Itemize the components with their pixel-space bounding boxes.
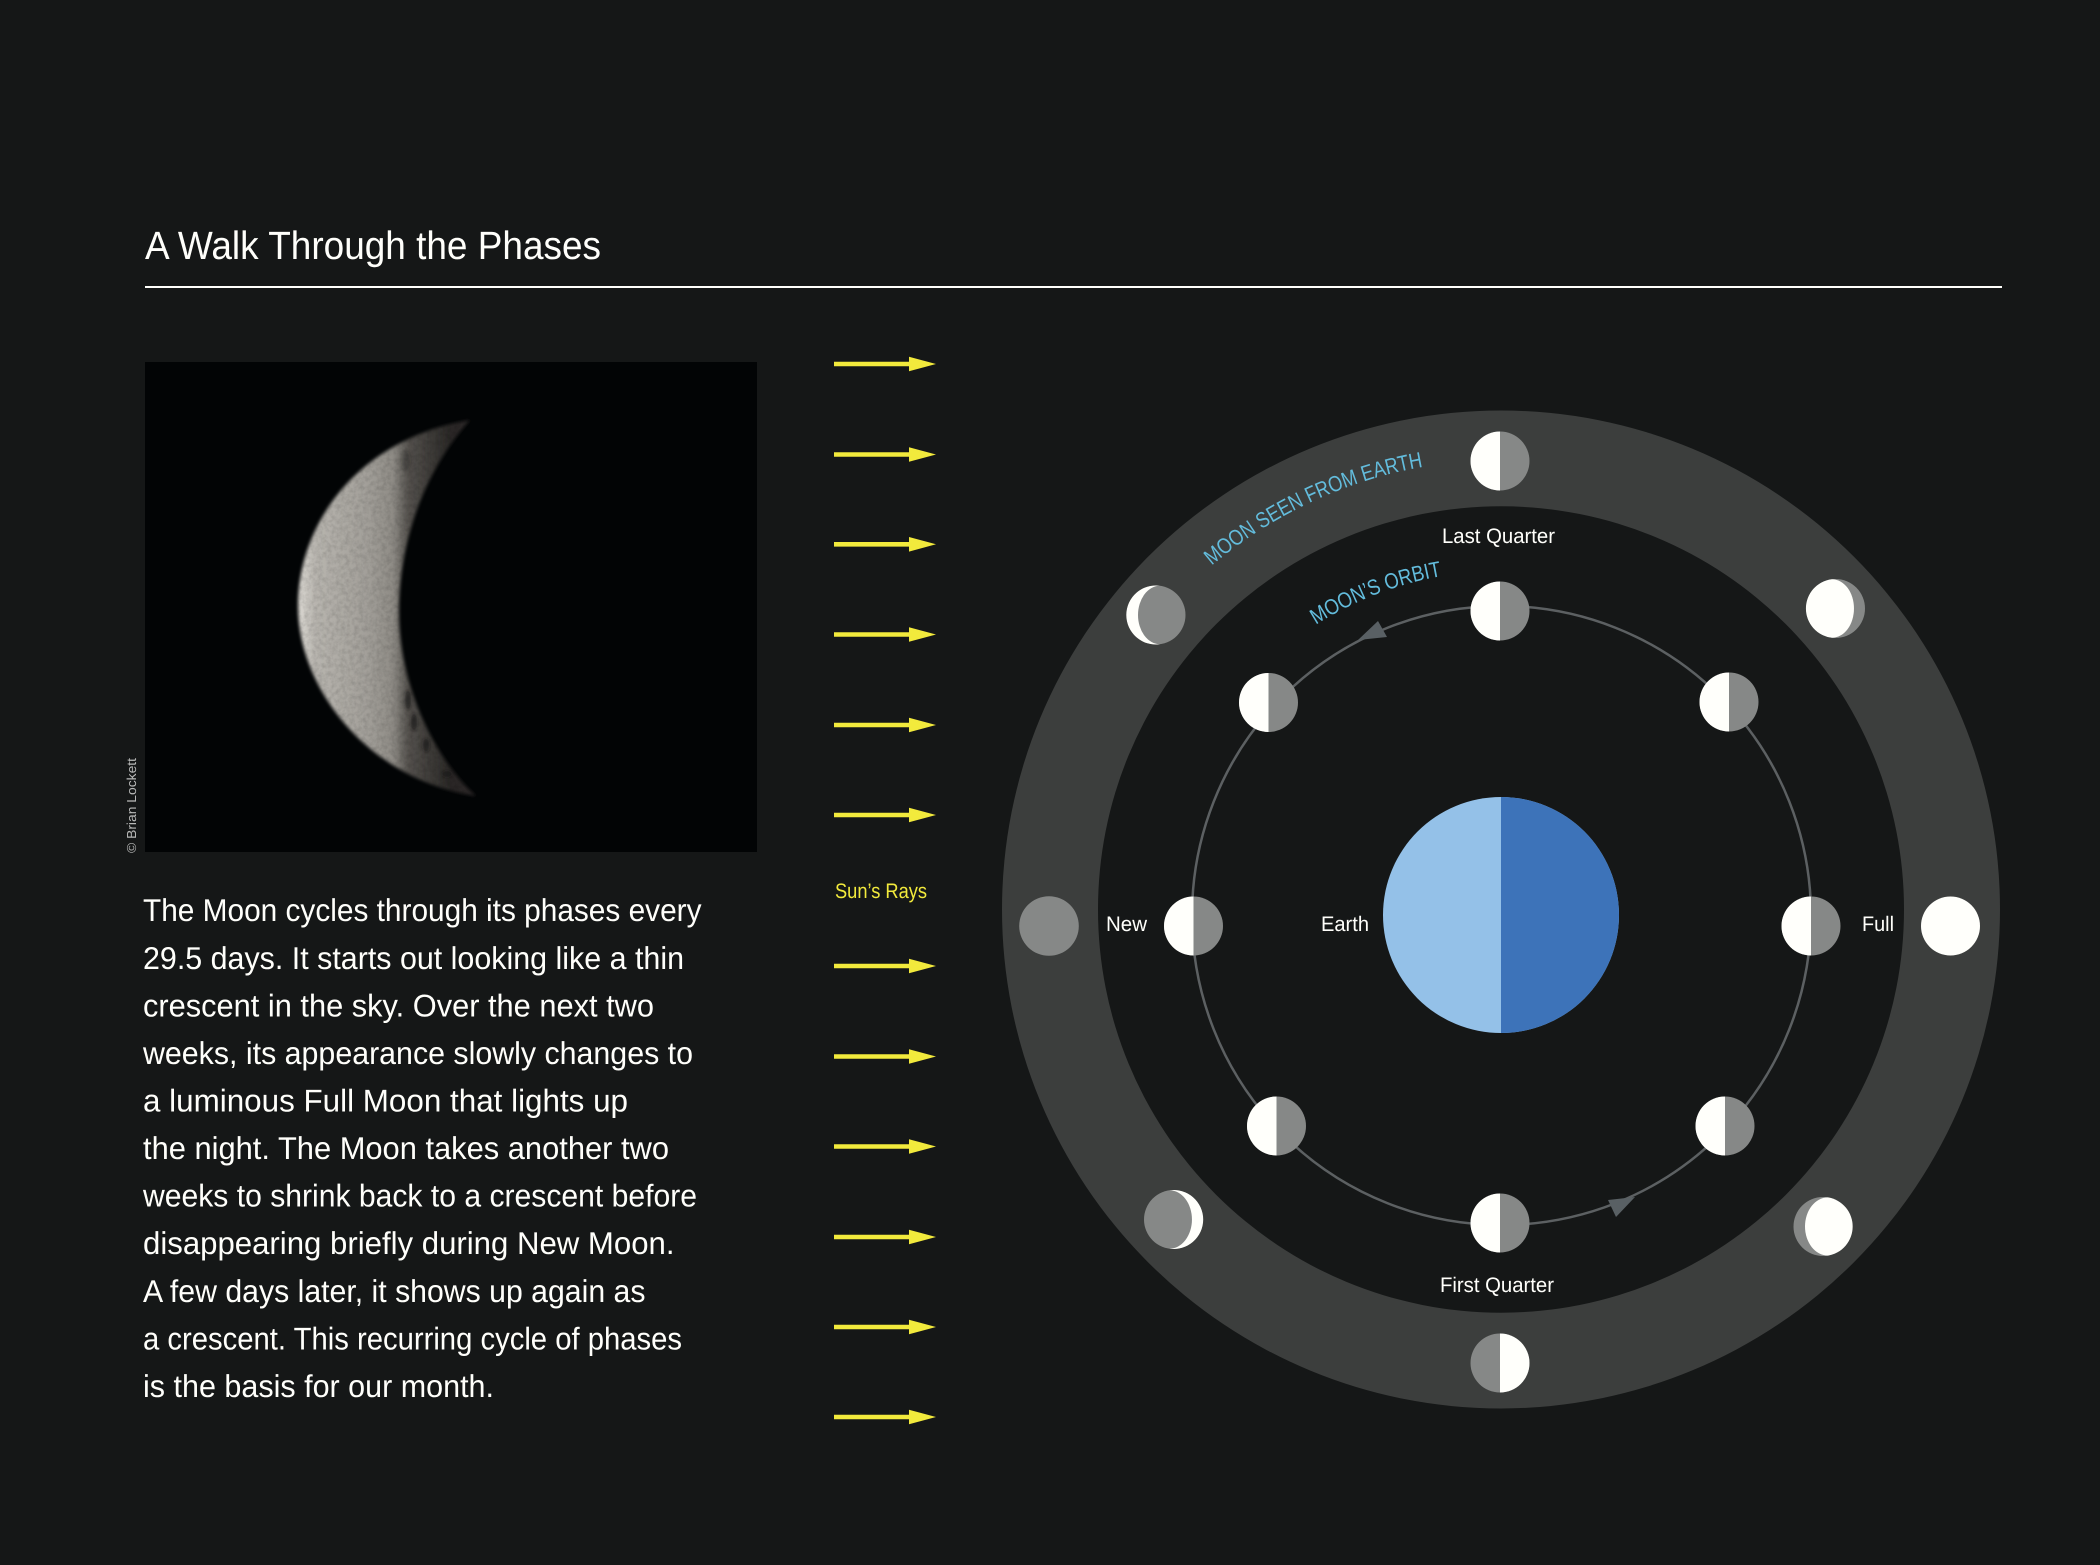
label: new: New [1106,913,1148,936]
moon: orbit top [1470,582,1530,640]
arrowhead: orbit direction upper [1358,621,1387,640]
label: moon's orbit: MOON’S ORBIT [1309,561,1439,624]
moon seen: waning crescent [1126,586,1186,645]
label: earth: Earth [1321,913,1369,936]
moon: orbit lower left [1247,1096,1306,1156]
text block: body paragraph [142,892,702,1404]
text block: body paragraph: disappearing briefly during New Moon. [143,1225,674,1261]
label: moon seen from earth: MOON SEEN FROM EARTH [1203,452,1422,565]
arrowhead: orbit direction lower [1608,1197,1635,1217]
text block: body paragraph: is the basis for our month. [143,1368,494,1404]
ring: moon seen from earth band [1002,410,2000,1408]
text block: body paragraph: a crescent. This recurring cycle of phases [143,1320,682,1356]
title: A Walk Through the Phases [145,224,601,268]
text block: body paragraph: the night. The Moon takes another two [143,1130,669,1166]
text block: body paragraph: 29.5 days. It starts out looking like a thin [143,940,684,976]
moon: orbit bottom [1470,1194,1530,1252]
orbit line [1192,606,1811,1225]
text block: body paragraph: A few days later, it shows up again as [143,1273,646,1309]
photo: waning crescent moon [298,420,476,796]
panel: moon photograph [145,362,757,852]
moon seen: waxing gibbous [1794,1197,1853,1256]
label: sun's rays: Sun’s Rays [835,880,927,903]
text block: body paragraph: weeks to shrink back to a crescent before [142,1178,697,1214]
moon: orbit upper right [1700,672,1758,732]
arrows: sun's rays [834,357,936,1424]
moon: orbit upper left [1239,673,1298,732]
text block: body paragraph: weeks, its appearance slowly changes to [142,1035,693,1071]
label: full: Full [1862,913,1894,936]
moon: orbit right [1782,896,1840,956]
moon: orbit lower right [1696,1096,1754,1156]
moon seen: waning gibbous [1806,579,1865,638]
moons on orbit [1164,582,1840,1252]
moons as seen from earth [1019,432,1980,1392]
earth [1383,797,1619,1033]
moon seen: new [1019,896,1079,956]
text block: body paragraph: crescent in the sky. Over the next two [143,988,654,1024]
label: last quarter: Last Quarter [1442,525,1555,548]
diagram: moon phases [1002,410,2000,1408]
moon seen: full [1921,896,1980,956]
moon seen: first quarter [1470,1334,1530,1392]
moon seen: waxing crescent [1144,1190,1203,1249]
text block: body paragraph: a luminous Full Moon that lights up [143,1082,628,1118]
label: first quarter: First Quarter [1440,1274,1554,1297]
moon seen: last quarter [1470,432,1530,490]
moon: orbit left [1164,896,1223,956]
photo credit: © Brian Lockett [124,758,139,853]
text block: body paragraph: The Moon cycles through its phases every [143,892,702,928]
